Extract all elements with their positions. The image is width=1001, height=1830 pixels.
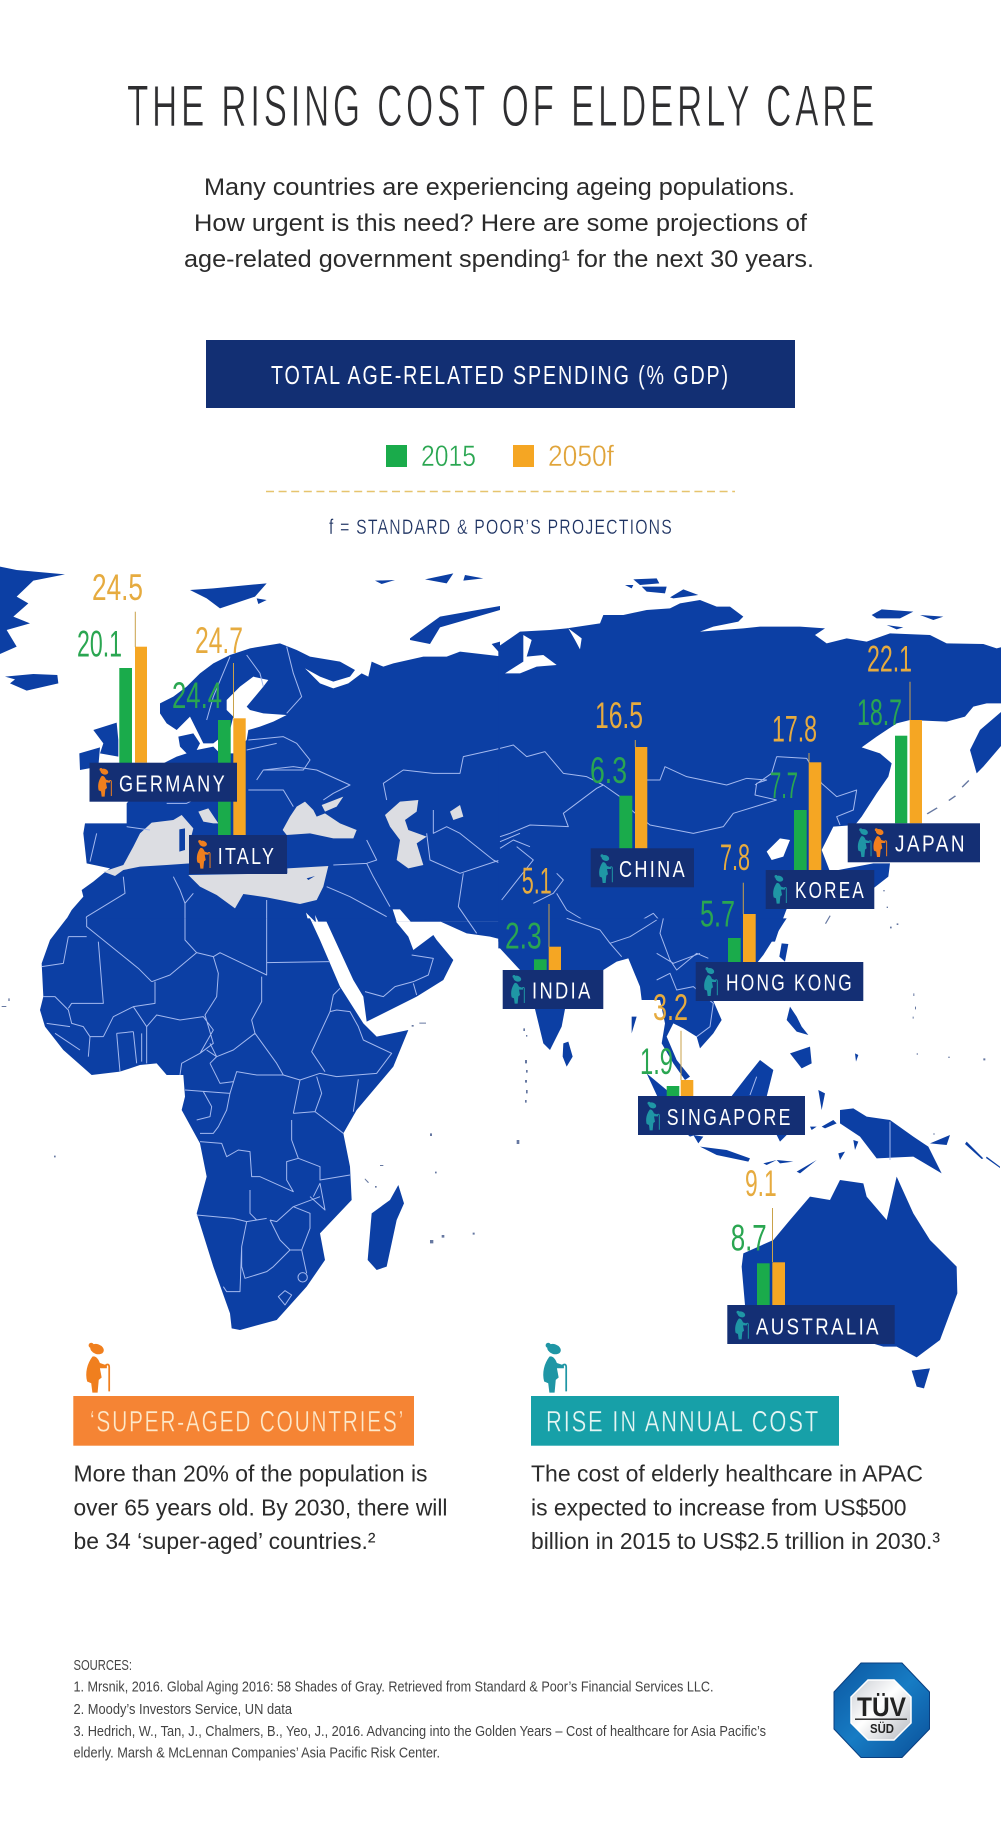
map: Siberian Arctic islands xyxy=(625,578,943,629)
intro text: How urgent is this need? Here are some projections of xyxy=(194,210,807,237)
chart: China xyxy=(590,695,694,887)
legend xyxy=(386,440,615,473)
chart: Japan: 22.1 xyxy=(867,639,912,680)
chart: Singapore xyxy=(638,987,805,1135)
logo: TÜV SÜD xyxy=(834,1663,930,1758)
chart: Hong Kong xyxy=(696,837,863,1001)
intro text xyxy=(184,174,814,273)
heading: rise in annual cost: RISE IN ANNUAL COST xyxy=(546,1406,820,1439)
chart: Germany: 24.5 xyxy=(92,567,143,608)
chart: India: INDIA xyxy=(532,977,593,1003)
chart: Korea: KOREA xyxy=(795,877,866,903)
body text: rise in annual cost xyxy=(531,1461,940,1554)
map: Australia xyxy=(742,1177,957,1388)
intro text: Many countries are experiencing ageing populations. xyxy=(204,174,795,201)
chart: China: CHINA xyxy=(619,856,687,882)
sources: elderly. Marsh & McLennan Companies’ Asia Pacific Risk Center. xyxy=(74,1744,440,1762)
chart: Italy xyxy=(172,620,287,874)
chart: Italy: 24.4 xyxy=(172,675,222,716)
sources: 1. Mrsnik, 2016. Global Aging 2016: 58 Shades of Gray. Retrieved from Standard & Poor’s Financial Services LLC. xyxy=(74,1679,714,1696)
chart: Germany: 20.1 xyxy=(77,624,122,665)
body text: rise in annual cost: billion in 2015 to US$2.5 trillion in 2030.³ xyxy=(531,1528,940,1554)
sources: 3. Hedrich, W., Tan, J., Chalmers, B., Yeo, J., 2016. Advancing into the Golden Years – Cost of healthcare for Asia Pacific’s xyxy=(74,1723,766,1740)
chart: Korea: 7.7 xyxy=(770,765,798,806)
chart: Australia xyxy=(727,1163,895,1344)
map: South and South-East Asia xyxy=(498,918,1000,1388)
logo: TÜV SÜD: TÜV xyxy=(857,1692,906,1722)
body text: rise in annual cost: is expected to increase from US$500 xyxy=(531,1495,906,1521)
chart: Italy: 24.7 xyxy=(195,620,243,661)
chart: Singapore: SINGAPORE xyxy=(667,1104,793,1130)
chart: Japan xyxy=(848,639,980,862)
heading: rise in annual cost xyxy=(531,1396,839,1446)
chart: Japan: JAPAN xyxy=(895,831,967,857)
chart: Singapore: 1.9 xyxy=(640,1041,673,1082)
chart: Korea xyxy=(766,709,874,909)
map: Africa and Arabia xyxy=(2,918,475,1330)
chart heading banner: TOTAL AGE-RELATED SPENDING (% GDP) xyxy=(271,360,730,390)
heading: super-aged countries xyxy=(73,1396,414,1446)
legend: 2015 xyxy=(421,440,476,473)
chart: Italy: ITALY xyxy=(218,843,276,869)
chart: Australia: AUSTRALIA xyxy=(756,1313,881,1339)
projection note: f = STANDARD & POOR’S PROJECTIONS xyxy=(329,516,673,539)
sources xyxy=(74,1657,766,1762)
body text: rise in annual cost: The cost of elderly healthcare in APAC xyxy=(531,1461,923,1487)
chart: Australia: 8.7 xyxy=(731,1218,767,1259)
body text: super-aged countries: over 65 years old. By 2030, there will xyxy=(74,1495,448,1521)
chart: Japan: 18.7 xyxy=(857,692,902,733)
sources: SOURCES: xyxy=(74,1657,132,1674)
panel: rise in annual cost xyxy=(531,1342,940,1554)
chart: Hong Kong: 7.8 xyxy=(720,837,750,878)
chart: Hong Kong: 5.7 xyxy=(700,894,735,935)
icon: elderly person, orange xyxy=(86,1342,109,1393)
chart: India: 2.3 xyxy=(505,915,542,956)
body text: super-aged countries xyxy=(74,1461,448,1554)
map: Asian and Pacific islands xyxy=(563,943,1000,1173)
world map xyxy=(0,567,1001,1388)
heading: super-aged countries: ‘SUPER-AGED COUNTRIES’ xyxy=(90,1406,405,1439)
chart: China: 6.3 xyxy=(590,750,627,791)
chart: India: 5.1 xyxy=(522,860,552,901)
chart: Australia: 9.1 xyxy=(745,1163,777,1204)
map: Greenland and north Atlantic islands xyxy=(0,567,500,770)
map: Europe and western Asia xyxy=(0,567,503,940)
panel: super-aged countries xyxy=(73,1342,448,1554)
chart: Germany xyxy=(77,567,237,802)
intro text: age-related government spending¹ for the next 30 years. xyxy=(184,246,814,273)
chart: Germany: GERMANY xyxy=(119,771,227,797)
logo: TÜV SÜD: SÜD xyxy=(870,1721,894,1736)
chart: India xyxy=(503,860,603,1009)
chart heading banner xyxy=(206,340,795,408)
body text: super-aged countries: More than 20% of the population is xyxy=(74,1461,428,1487)
body text: super-aged countries: be 34 ‘super-aged’ countries.² xyxy=(74,1528,376,1554)
chart: China: 16.5 xyxy=(595,695,643,736)
icon: elderly person, teal xyxy=(543,1342,566,1393)
sources: 2. Moody’s Investors Service, UN data xyxy=(74,1701,293,1718)
legend: 2050f xyxy=(548,440,615,473)
chart: Hong Kong: HONG KONG xyxy=(726,970,854,996)
map: northern and eastern Asia xyxy=(498,578,1001,942)
chart: Singapore: 3.2 xyxy=(653,987,688,1028)
chart: Korea: 17.8 xyxy=(772,709,817,750)
